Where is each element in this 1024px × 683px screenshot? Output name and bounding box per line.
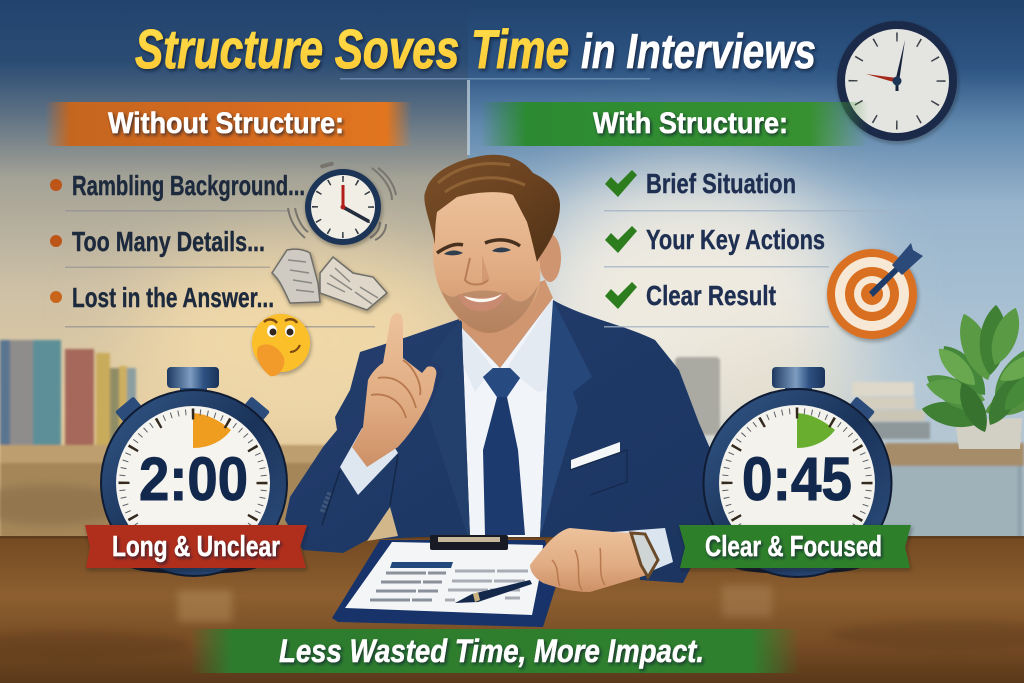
person: right cuff, hand and watch <box>530 528 673 592</box>
person: businessman pointing up <box>285 155 715 583</box>
stubble <box>441 285 538 333</box>
title: in Interviews <box>581 25 816 79</box>
wooden desk <box>0 536 1024 683</box>
pen <box>455 580 532 603</box>
heading band: without structure <box>45 102 412 146</box>
icon: thinking face emoji <box>252 314 310 376</box>
bullet item 1: Rambling Background... <box>72 170 305 201</box>
finger creases <box>371 360 420 418</box>
collar right <box>507 298 553 392</box>
hand knuckles <box>552 548 605 590</box>
right shelf with books and laptop <box>675 357 1024 538</box>
sleeve buttons <box>322 492 330 512</box>
lapel left <box>428 318 470 537</box>
check item 1: Brief Situation <box>646 168 796 199</box>
ribbon: long and unclear: Long & Unclear <box>112 531 280 563</box>
minor ticks <box>724 410 870 556</box>
left shirt cuff <box>340 428 398 495</box>
elapsed wedge <box>193 413 231 448</box>
background wall: warm left side <box>0 0 468 683</box>
ribbon: clear and focused <box>679 525 911 568</box>
bullet item 1 <box>50 170 305 201</box>
face <box>433 185 540 334</box>
resume heading bar <box>390 562 453 568</box>
suit jacket <box>285 300 715 583</box>
clipboard clip <box>430 535 508 550</box>
nose bridge shade <box>482 255 490 282</box>
heading: with structure: With Structure: <box>593 107 788 140</box>
banner text: Less Wasted Time, More Impact. <box>279 633 704 669</box>
minor ticks <box>122 412 264 554</box>
side button <box>845 396 875 426</box>
side buttons <box>115 396 270 426</box>
title: Structure Soves Time <box>135 18 569 80</box>
bullet item 3: Lost in the Answer... <box>72 282 274 313</box>
background glow: right centre light <box>520 170 860 430</box>
panel: with structure <box>480 102 909 328</box>
tie knot <box>483 368 520 397</box>
smile <box>458 292 507 311</box>
stopwatch: 2:00 long and unclear <box>101 367 287 576</box>
stopwatch: 0:45 clear and focused <box>704 367 892 577</box>
shirt <box>462 298 553 537</box>
gap between arm and torso <box>367 507 398 541</box>
pocket line <box>570 450 627 495</box>
icon: target with arrow <box>827 243 923 339</box>
raised hand <box>352 313 436 467</box>
collar left <box>462 328 493 392</box>
background wall: cool right side <box>468 0 1024 683</box>
ribbon: long and unclear <box>85 525 307 568</box>
eyebrows <box>437 240 520 253</box>
lapel right <box>540 300 592 537</box>
background glow: lower right cream wall <box>680 350 860 450</box>
right hand on desk <box>530 528 657 592</box>
hair highlights <box>438 164 525 192</box>
panel divider line <box>467 80 470 155</box>
bullet item 3 <box>50 282 274 313</box>
check item 1 <box>605 168 796 199</box>
check item 2 <box>605 224 825 255</box>
heading band: with structure <box>480 102 868 146</box>
background glow: left warm light <box>130 250 470 430</box>
time value: 2:00 <box>139 445 248 513</box>
bullet item 2: Too Many Details... <box>72 226 265 257</box>
check item 3 <box>605 280 776 311</box>
right shirt cuff <box>613 528 673 577</box>
bottom banner <box>190 629 800 673</box>
check item 2: Your Key Actions <box>646 224 825 255</box>
left bookshelf <box>0 340 360 538</box>
dial <box>116 406 270 560</box>
watch body <box>704 389 892 577</box>
resume text lines <box>370 571 528 600</box>
icon: messy papers <box>272 249 387 310</box>
teeth <box>464 294 502 302</box>
pocket square <box>571 442 620 470</box>
time value: 0:45 <box>742 445 852 513</box>
clipboard with resume and pen <box>332 535 557 627</box>
hair <box>424 155 560 262</box>
wall clock <box>837 21 957 141</box>
eyes <box>444 248 511 255</box>
panel: without structure <box>45 102 412 328</box>
neck <box>456 280 553 368</box>
dial <box>719 405 875 561</box>
crown <box>785 386 812 399</box>
major ticks <box>123 413 263 553</box>
wristwatch <box>631 533 658 577</box>
nose <box>465 258 488 284</box>
ear <box>539 234 561 282</box>
potted plant <box>920 304 1024 449</box>
ribbon: clear and focused: Clear & Focused <box>705 531 882 563</box>
check item 3: Clear Result <box>646 280 776 311</box>
major ticks <box>726 412 868 554</box>
crown <box>180 386 207 399</box>
arm fold <box>322 455 398 525</box>
watch body <box>101 390 287 576</box>
icon: shaking stopwatch <box>288 161 396 245</box>
heading: without structure: Without Structure: <box>108 107 344 140</box>
title underline <box>340 78 650 80</box>
tie <box>483 368 525 535</box>
elapsed wedge <box>797 413 835 448</box>
